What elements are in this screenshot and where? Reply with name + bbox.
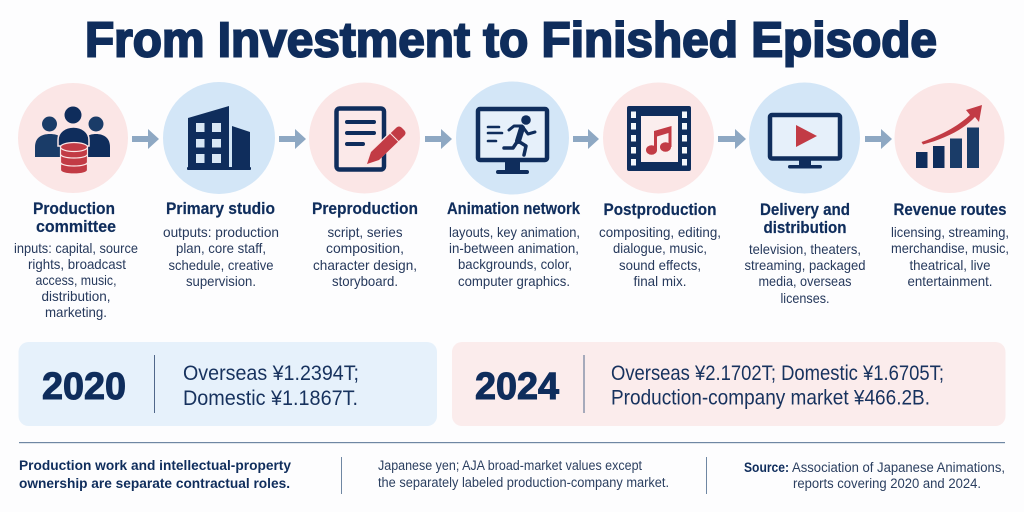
text: animation tasks: in-between animation, xyxy=(449,241,579,256)
text: animation tasks: layouts, key animation, xyxy=(449,225,580,240)
step: animation network xyxy=(447,82,580,289)
text: animation tasks xyxy=(449,225,580,289)
values 2020: Overseas ¥1.2394T; xyxy=(183,361,359,385)
text: revenue routes: theatrical, live xyxy=(910,258,990,273)
text: revenue routes: merchandise, music, xyxy=(891,241,1009,256)
text: studio outputs: supervision. xyxy=(186,274,256,289)
text: preproduction tasks: composition, xyxy=(326,241,404,256)
text: studio outputs: outputs: production xyxy=(163,225,279,240)
footer note: currency: the separately labeled production-company market. xyxy=(378,475,669,490)
step: production committee xyxy=(14,83,138,320)
text: committee inputs: distribution, xyxy=(42,289,110,304)
values 2024: Production-company market ¥466.2B. xyxy=(611,386,930,410)
icon: script and pencil xyxy=(309,82,420,194)
values 2020 xyxy=(183,361,359,410)
text: revenue routes: entertainment. xyxy=(908,274,992,289)
arrow 6 xyxy=(865,129,892,149)
arrow 1 xyxy=(132,129,159,149)
text: animation tasks: computer graphics. xyxy=(458,274,570,289)
heading: delivery and distribution xyxy=(760,200,850,237)
footer note: currency xyxy=(378,458,669,490)
values 2024 xyxy=(611,361,944,410)
icon: screen with play button xyxy=(749,82,860,194)
values 2020: Domestic ¥1.1867T. xyxy=(183,386,358,410)
icon: committee with coins xyxy=(18,83,128,193)
text: delivery channels: streaming, packaged xyxy=(744,258,866,273)
text: delivery channels: media, overseas xyxy=(758,274,852,289)
heading: delivery and distribution: distribution xyxy=(764,218,846,237)
heading: postproduction: Postproduction xyxy=(604,200,716,219)
heading: production committee: Production xyxy=(33,199,115,218)
text: studio outputs: plan, core staff, xyxy=(176,241,266,256)
arrow 3 xyxy=(425,129,452,149)
text: studio outputs: schedule, creative xyxy=(168,258,274,273)
heading: production committee: committee xyxy=(36,217,116,236)
text: delivery channels: licenses. xyxy=(780,291,830,306)
values 2024: Overseas ¥2.1702T; Domestic ¥1.6705T; xyxy=(611,361,944,385)
footer note: source: Source: xyxy=(744,460,789,475)
icon: studio building xyxy=(163,82,275,194)
icon: rising bar chart xyxy=(894,83,1004,193)
footer note: currency: Japanese yen; AJA broad-market values except xyxy=(378,458,642,473)
footer note: source xyxy=(744,460,1005,491)
step: primary studio xyxy=(163,82,279,289)
footer note: roles xyxy=(19,458,291,492)
text: preproduction tasks: script, series xyxy=(328,225,403,240)
heading: production committee xyxy=(33,199,116,236)
text: animation tasks: backgrounds, color, xyxy=(458,257,572,272)
heading: delivery and distribution: Delivery and xyxy=(760,200,850,219)
text: delivery channels: television, theaters, xyxy=(749,242,861,257)
text: preproduction tasks: storyboard. xyxy=(332,274,398,289)
text: committee inputs: inputs: capital, source xyxy=(14,241,138,256)
text: postproduction tasks: dialogue, music, xyxy=(613,241,707,256)
footer note: roles: ownership are separate contractual roles. xyxy=(19,476,290,492)
icon: film strip with music note xyxy=(603,82,714,194)
step: revenue routes xyxy=(891,83,1009,289)
text: revenue routes xyxy=(891,225,1009,289)
text: preproduction tasks xyxy=(313,225,417,289)
step: preproduction xyxy=(309,82,420,289)
year 2020: 2020 xyxy=(42,366,126,408)
footer note: roles: Production work and intellectual-property xyxy=(19,458,291,474)
step: postproduction xyxy=(599,82,721,289)
heading: animation network: Animation network xyxy=(447,199,580,218)
step: delivery and distribution xyxy=(744,82,866,306)
arrow 4 xyxy=(573,129,599,149)
footer note: source: Association of Japanese Animations, xyxy=(792,460,1005,475)
text: committee inputs xyxy=(14,241,138,320)
footer note: source: reports covering 2020 and 2024. xyxy=(793,476,981,491)
text: studio outputs xyxy=(163,225,279,289)
text: postproduction tasks xyxy=(599,225,721,289)
text: delivery channels xyxy=(744,242,866,306)
text: postproduction tasks: sound effects, xyxy=(619,258,701,273)
icon: monitor with runner xyxy=(456,82,569,194)
text: preproduction tasks: character design, xyxy=(313,258,417,273)
text: postproduction tasks: compositing, editing, xyxy=(599,225,721,240)
arrow 2 xyxy=(279,129,306,149)
arrow 5 xyxy=(718,129,746,149)
text: postproduction tasks: final mix. xyxy=(634,274,686,289)
heading: preproduction: Preproduction xyxy=(312,199,418,218)
title: From Investment to Finished Episode xyxy=(85,14,937,68)
text: committee inputs: access, music, xyxy=(36,273,116,288)
year 2024: 2024 xyxy=(475,366,559,408)
heading: primary studio: Primary studio xyxy=(166,199,275,218)
text: committee inputs: rights, broadcast xyxy=(28,257,126,272)
text: committee inputs: marketing. xyxy=(45,305,107,320)
heading: revenue routes: Revenue routes xyxy=(894,200,1006,219)
panel: 2024 xyxy=(452,342,1006,426)
panel: 2020 xyxy=(18,342,437,426)
text: revenue routes: licensing, streaming, xyxy=(891,225,1009,240)
